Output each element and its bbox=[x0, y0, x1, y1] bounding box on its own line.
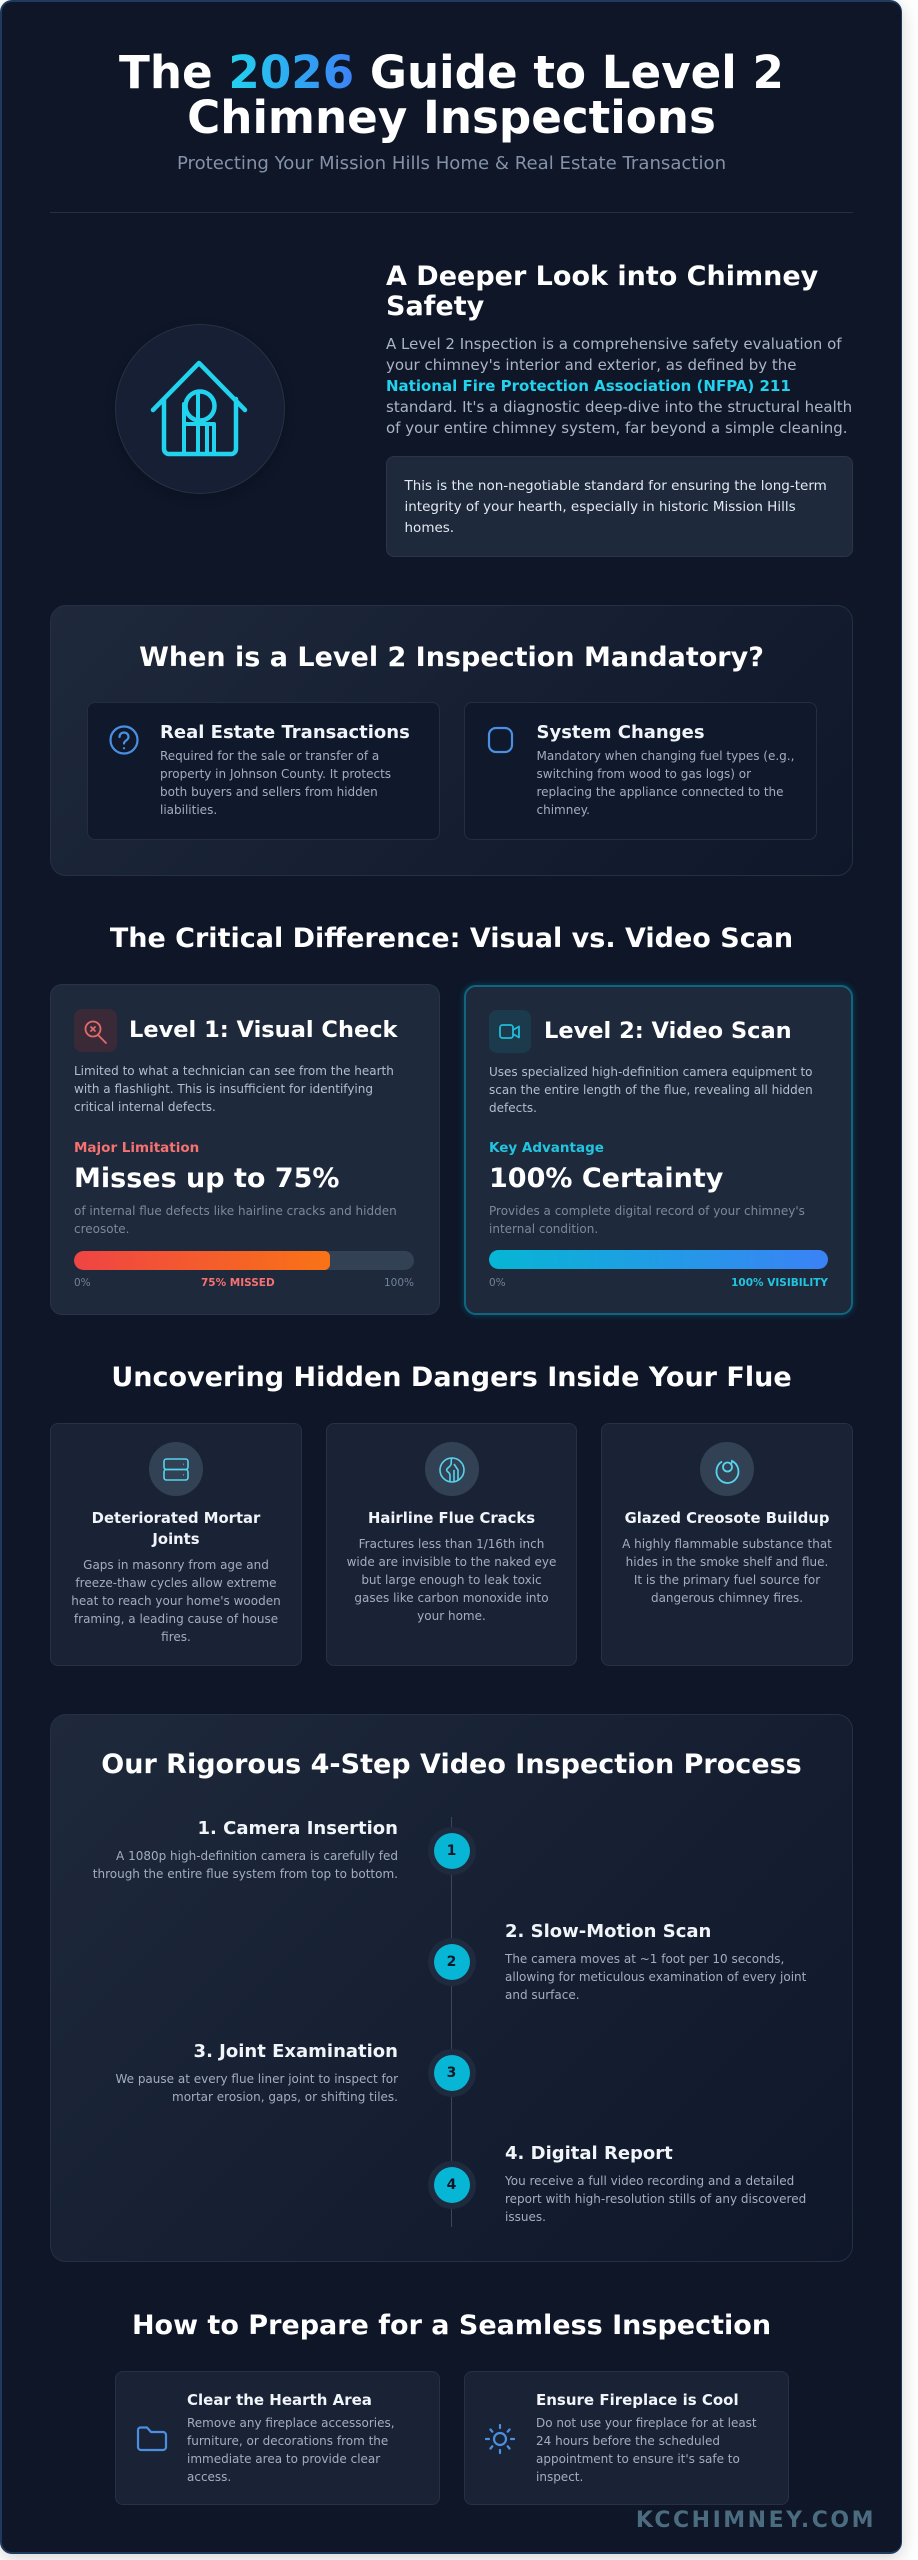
card: mortar joints: fires. bbox=[161, 1630, 191, 1644]
icon: mortar bbox=[149, 1442, 203, 1496]
heading: how to prepare: How to Prepare for a Seamless Inspection bbox=[132, 2310, 771, 2341]
card: system changes: System Changes bbox=[536, 722, 705, 743]
icon: question bbox=[109, 725, 139, 755]
step 3 text: We pause at every flue liner joint to inspect for bbox=[115, 2072, 398, 2086]
panel: level 2: Key Advantage bbox=[489, 1140, 604, 1156]
card: flue cracks: Hairline Flue Cracks bbox=[368, 1510, 535, 1527]
card: flue cracks: your home. bbox=[417, 1609, 486, 1623]
panel: process timeline bbox=[50, 1714, 853, 2262]
panel: level 1: creosote. bbox=[74, 1222, 130, 1236]
panel: level 2: Provides a complete digital record of your chimney's bbox=[489, 1204, 805, 1218]
card: mortar joints: Deteriorated Mortar bbox=[92, 1510, 260, 1527]
card: clear the hearth: immediate area to provide clear bbox=[187, 2452, 380, 2466]
subtitle: Protecting Your Mission Hills Home & Real Estate Transaction bbox=[177, 153, 726, 174]
card: system changes: chimney. bbox=[536, 803, 590, 817]
panel: level 2: scan the entire length of the flue, revealing all hidden bbox=[489, 1083, 813, 1097]
step 2 text: The camera moves at ~1 foot per 10 seconds, bbox=[505, 1952, 784, 1966]
card: system changes: replacing the appliance connected to the bbox=[536, 785, 784, 799]
card: clear the hearth bbox=[115, 2371, 440, 2505]
step 1 text: 1. Camera Insertion bbox=[197, 1818, 398, 1839]
heading: critical difference: The Critical Difference: Visual vs. Video Scan bbox=[110, 923, 793, 954]
card: flue cracks bbox=[326, 1423, 577, 1666]
step 4 text: You receive a full video recording and a detailed bbox=[505, 2174, 794, 2188]
card: mortar joints: freeze-thaw cycles allow extreme bbox=[75, 1576, 277, 1590]
card: real estate: both buyers and sellers from hidden bbox=[160, 785, 378, 799]
step 2 text bbox=[504, 1920, 806, 2002]
panel: level 1: of internal flue defects like hairline cracks and hidden bbox=[74, 1204, 397, 1218]
step 2 marker: 2 bbox=[447, 1954, 456, 1970]
card: creosote bbox=[601, 1423, 853, 1666]
heading: deeper look: A Deeper Look into Chimney bbox=[386, 260, 818, 292]
step 3 text: 3. Joint Examination bbox=[194, 2041, 398, 2062]
panel: level 2: defects. bbox=[489, 1101, 537, 1115]
panel: level 2: Level 2: Video Scan bbox=[544, 1018, 792, 1044]
panel: level 1: 75% MISSED bbox=[201, 1277, 275, 1289]
panel: level 2 bbox=[464, 985, 853, 1315]
panel: level 2: 100% VISIBILITY bbox=[731, 1277, 828, 1289]
card: creosote: dangerous chimney fires. bbox=[651, 1591, 803, 1605]
panel: level 1: Level 1: Visual Check bbox=[129, 1017, 398, 1043]
card: real estate: Real Estate Transactions bbox=[160, 722, 410, 743]
card: creosote: A highly flammable substance that bbox=[622, 1537, 832, 1551]
step 4 marker bbox=[434, 2167, 470, 2203]
panel: level 1: 0% bbox=[74, 1277, 91, 1289]
panel: level 1: 100% bbox=[384, 1277, 414, 1289]
title: Chimney Inspections bbox=[187, 91, 716, 144]
panel: level 2: 0% bbox=[489, 1277, 506, 1289]
card: fireplace cool: Ensure Fireplace is Cool bbox=[536, 2391, 739, 2409]
card: mortar joints: Gaps in masonry from age and bbox=[83, 1558, 269, 1572]
panel: level 1: Limited to what a technician can see from the hearth bbox=[74, 1064, 394, 1078]
intro paragraph: standard. It's a diagnostic deep-dive into the structural health bbox=[386, 398, 852, 416]
step 3 text: mortar erosion, gaps, or shifting tiles. bbox=[172, 2090, 398, 2104]
heading: Our Rigorous 4-Step Video Inspection Process bbox=[101, 1749, 802, 1780]
step 1 text bbox=[93, 1818, 398, 1881]
step 1 text: through the entire flue system from top to bottom. bbox=[93, 1867, 398, 1881]
card: flue cracks: Fractures less than 1/16th inch bbox=[359, 1537, 544, 1551]
intro paragraph bbox=[386, 334, 852, 436]
card: real estate bbox=[87, 702, 440, 840]
progress bar: 100% bbox=[489, 1250, 828, 1269]
panel: level 2: Uses specialized high-definition camera equipment to bbox=[489, 1065, 813, 1079]
step 1 text: A 1080p high-definition camera is carefully fed bbox=[116, 1849, 398, 1863]
card: fireplace cool: 24 hours before the scheduled bbox=[536, 2434, 720, 2448]
step 3 text bbox=[115, 2041, 398, 2104]
intro paragraph: A Level 2 Inspection is a comprehensive safety evaluation of bbox=[386, 334, 842, 352]
card: mortar joints: framing, a leading cause of house bbox=[74, 1612, 278, 1626]
step 2 text: and surface. bbox=[505, 1988, 580, 2002]
intro paragraph: your chimney's interior and exterior, as defined by the bbox=[386, 356, 797, 374]
callout: This is the non-negotiable standard for ensuring the long-term bbox=[404, 478, 827, 494]
card: clear the hearth: furniture, or decorations from the bbox=[187, 2434, 388, 2448]
panel: level 1 bbox=[50, 984, 440, 1315]
title bbox=[119, 46, 784, 144]
card: system changes bbox=[464, 702, 817, 840]
heading: hidden dangers: Uncovering Hidden Dangers Inside Your Flue bbox=[111, 1362, 792, 1393]
step 4 text: issues. bbox=[505, 2210, 546, 2224]
step 3 marker: 3 bbox=[447, 2065, 456, 2081]
card: mortar joints bbox=[50, 1423, 302, 1666]
callout bbox=[386, 456, 853, 557]
panel: level 1: critical internal defects. bbox=[74, 1100, 216, 1114]
icon: video camera bbox=[489, 1010, 531, 1053]
panel: level 1: Major Limitation bbox=[74, 1140, 199, 1156]
heading: deeper look bbox=[386, 260, 818, 322]
card: fireplace cool: inspect. bbox=[536, 2470, 583, 2484]
card: real estate: Required for the sale or transfer of a bbox=[160, 749, 379, 763]
step 4 text bbox=[505, 2143, 806, 2224]
card: mortar joints: Joints bbox=[152, 1531, 200, 1548]
panel: level 2: internal condition. bbox=[489, 1222, 598, 1236]
step 3 marker bbox=[434, 2055, 470, 2091]
step 2 text: allowing for meticulous examination of every joint bbox=[505, 1970, 806, 1984]
card: system changes: Mandatory when changing fuel types (e.g., bbox=[536, 749, 794, 763]
card: clear the hearth: Remove any fireplace accessories, bbox=[187, 2416, 395, 2430]
step 4 marker: 4 bbox=[447, 2177, 456, 2193]
panel: level 2: 100% Certainty bbox=[489, 1162, 723, 1194]
icon: sun bbox=[484, 2424, 516, 2454]
card: creosote: It is the primary fuel source for bbox=[634, 1573, 820, 1587]
icon: folder bbox=[136, 2426, 168, 2452]
card: system changes: switching from wood to gas logs) or bbox=[536, 767, 751, 781]
card: fireplace cool bbox=[464, 2371, 789, 2505]
card: fireplace cool: Do not use your fireplace for at least bbox=[536, 2416, 757, 2430]
step 2 text: 2. Slow-Motion Scan bbox=[505, 1920, 711, 1942]
intro paragraph: National Fire Protection Association (NFPA) 211 bbox=[386, 376, 791, 394]
progress bar: 75% bbox=[74, 1251, 414, 1270]
card: flue cracks: but large enough to leak toxic bbox=[361, 1573, 542, 1587]
card: fireplace cool: appointment to ensure it's safe to bbox=[536, 2452, 740, 2466]
watermark: KCCHIMNEY.COM bbox=[636, 2508, 876, 2533]
card: clear the hearth: Clear the Hearth Area bbox=[187, 2391, 372, 2409]
card: real estate: property in Johnson County. It protects bbox=[160, 767, 391, 781]
heading: deeper look: Safety bbox=[386, 290, 484, 322]
panel: level 1: Misses up to 75% bbox=[74, 1162, 339, 1194]
callout: integrity of your hearth, especially in historic Mission Hills bbox=[404, 498, 796, 514]
card: creosote: Glazed Creosote Buildup bbox=[625, 1510, 829, 1527]
card: clear the hearth: access. bbox=[187, 2470, 231, 2484]
icon: magnifier with x bbox=[74, 1009, 117, 1052]
intro paragraph: of your entire chimney system, far beyond a simple cleaning. bbox=[386, 418, 848, 436]
heading: When is a Level 2 Inspection Mandatory? bbox=[139, 642, 764, 672]
title: The 2026 Guide to Level 2 bbox=[119, 46, 784, 99]
card: flue cracks: wide are invisible to the naked eye bbox=[347, 1555, 556, 1569]
step 2 marker bbox=[434, 1944, 470, 1980]
step 1 marker bbox=[434, 1833, 470, 1869]
callout: homes. bbox=[404, 520, 454, 536]
card: mortar joints: heat to reach your home's wooden bbox=[71, 1594, 281, 1608]
card: flue cracks: gases like carbon monoxide into bbox=[354, 1591, 549, 1605]
step 4 text: report with high-resolution stills of any discovered bbox=[505, 2192, 806, 2206]
panel: when mandatory bbox=[50, 605, 853, 876]
panel: level 1: with a flashlight. This is insufficient for identifying bbox=[74, 1082, 373, 1096]
card: creosote: hides in the smoke shelf and flue. bbox=[626, 1555, 828, 1569]
icon: creosote ring bbox=[700, 1442, 754, 1496]
icon: house with chimney liner bbox=[115, 324, 285, 494]
icon: cracked globe bbox=[425, 1442, 479, 1496]
step 1 marker: 1 bbox=[447, 1843, 456, 1859]
step 4 text: 4. Digital Report bbox=[505, 2143, 673, 2164]
card: real estate: liabilities. bbox=[160, 803, 217, 817]
icon: rounded square bbox=[488, 726, 514, 754]
